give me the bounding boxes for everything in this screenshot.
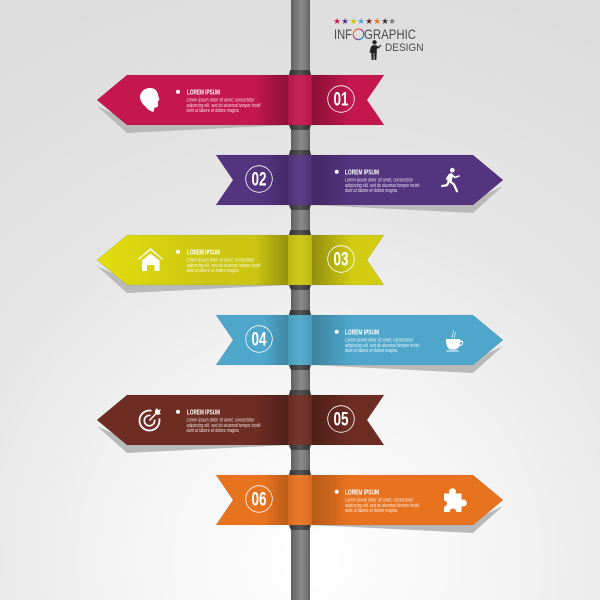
rating stars: ★ <box>357 17 365 27</box>
text block: adipiscing elit, sed do eiusmod tempor incidi- <box>186 423 262 429</box>
number badge: 02 <box>252 170 266 190</box>
shadow <box>97 266 288 293</box>
title text line one continued: GRAPHIC <box>364 26 416 42</box>
text block: dunt ut labore et dolore magna. <box>345 508 398 514</box>
text block <box>335 330 420 354</box>
text block: LOREM IPSUM <box>187 90 220 96</box>
text block: LOREM IPSUM <box>345 330 379 336</box>
text block: adipiscing elit, sed do eiusmod tempor incidi- <box>345 343 420 349</box>
arrow 03: yellow <box>97 230 384 293</box>
text block: adipiscing elit, sed do eiusmod tempor incidi- <box>186 103 262 109</box>
signpost pole <box>291 0 310 600</box>
text block <box>176 410 262 434</box>
sleeve <box>288 70 312 130</box>
fold shading <box>254 75 384 125</box>
arrow 01: crimson <box>97 70 384 133</box>
text block <box>335 170 420 194</box>
rating stars: ★ <box>341 17 349 27</box>
text block: LOREM IPSUM <box>345 170 379 176</box>
shadow <box>312 506 503 533</box>
title text line two: DESIGN <box>385 42 424 54</box>
text block: adipiscing elit, sed do eiusmod tempor incidi- <box>345 183 420 189</box>
sleeve <box>288 390 312 450</box>
number badge: 04 <box>252 330 267 350</box>
arrow body <box>97 235 384 285</box>
sleeve <box>288 310 312 370</box>
fold shading <box>264 315 350 365</box>
arrow 05: brown <box>97 390 384 453</box>
text block <box>176 250 262 274</box>
title text line one: INF <box>334 26 352 42</box>
shadow <box>312 346 503 373</box>
title logo <box>333 17 424 60</box>
arrow body <box>216 315 503 365</box>
arrow body <box>216 475 503 525</box>
text block <box>335 490 420 514</box>
arrow 06: orange <box>216 470 503 533</box>
rainbow letter O <box>353 29 364 40</box>
rating stars: ★ <box>381 17 389 27</box>
text block: Lorem ipsum dolor sit amet, consectetur <box>345 338 413 344</box>
text block: LOREM IPSUM <box>187 410 220 416</box>
number badge <box>246 326 272 352</box>
shadow <box>97 106 288 133</box>
rating stars: ★ <box>365 17 373 27</box>
arrow body <box>97 395 384 445</box>
sleeve <box>288 470 312 530</box>
text block: adipiscing elit, sed do eiusmod tempor incidi- <box>345 503 420 509</box>
text block <box>176 90 262 114</box>
number badge <box>328 246 354 272</box>
text block: Lorem ipsum dolor sit amet, consectetur <box>345 498 413 504</box>
text block: Lorem ipsum dolor sit amet, consectetur <box>345 178 413 184</box>
icon: head <box>140 88 160 112</box>
icon: target <box>140 408 161 430</box>
presenter figure <box>369 40 382 60</box>
text block: LOREM IPSUM <box>345 490 379 496</box>
number badge <box>328 86 354 112</box>
fold shading <box>254 395 384 445</box>
rating stars: ★ <box>350 17 358 27</box>
text block: dunt ut labore et dolore magna. <box>186 108 240 114</box>
number badge: 03 <box>334 250 348 270</box>
icon: puzzle piece <box>444 488 467 512</box>
shadow <box>312 186 503 213</box>
text block: dunt ut labore et dolore magna. <box>345 348 398 354</box>
icon: runner <box>442 168 459 191</box>
arrow 02: purple <box>216 150 503 213</box>
number badge: 01 <box>334 90 349 110</box>
number badge <box>246 166 272 192</box>
icon: coffee cup <box>446 330 463 352</box>
fold shading <box>264 155 350 205</box>
arrow 04: blue <box>216 310 503 373</box>
shadow <box>97 426 288 453</box>
rating stars: ★ <box>373 17 381 27</box>
text block: dunt ut labore et dolore magna. <box>186 268 240 274</box>
text block: LOREM IPSUM <box>187 250 220 256</box>
text block: Lorem ipsum dolor sit amet, consectetur <box>186 258 255 264</box>
text block: dunt ut labore et dolore magna. <box>186 428 240 434</box>
rating stars: ★ <box>388 17 396 27</box>
fold shading <box>254 235 384 285</box>
rating stars <box>333 17 396 27</box>
sleeve <box>288 230 312 290</box>
text block: dunt ut labore et dolore magna. <box>345 188 398 194</box>
arrow body <box>216 155 503 205</box>
number badge <box>328 406 354 432</box>
text block: Lorem ipsum dolor sit amet, consectetur <box>186 98 255 104</box>
arrow body <box>97 75 384 125</box>
number badge <box>246 486 272 512</box>
text block: adipiscing elit, sed do eiusmod tempor incidi- <box>186 263 262 269</box>
fold shading <box>264 475 350 525</box>
rating stars: ★ <box>333 17 341 27</box>
icon: house <box>138 248 163 271</box>
sleeve <box>288 150 312 210</box>
number badge: 05 <box>334 410 349 430</box>
text block: Lorem ipsum dolor sit amet, consectetur <box>186 418 255 424</box>
number badge: 06 <box>252 490 266 510</box>
